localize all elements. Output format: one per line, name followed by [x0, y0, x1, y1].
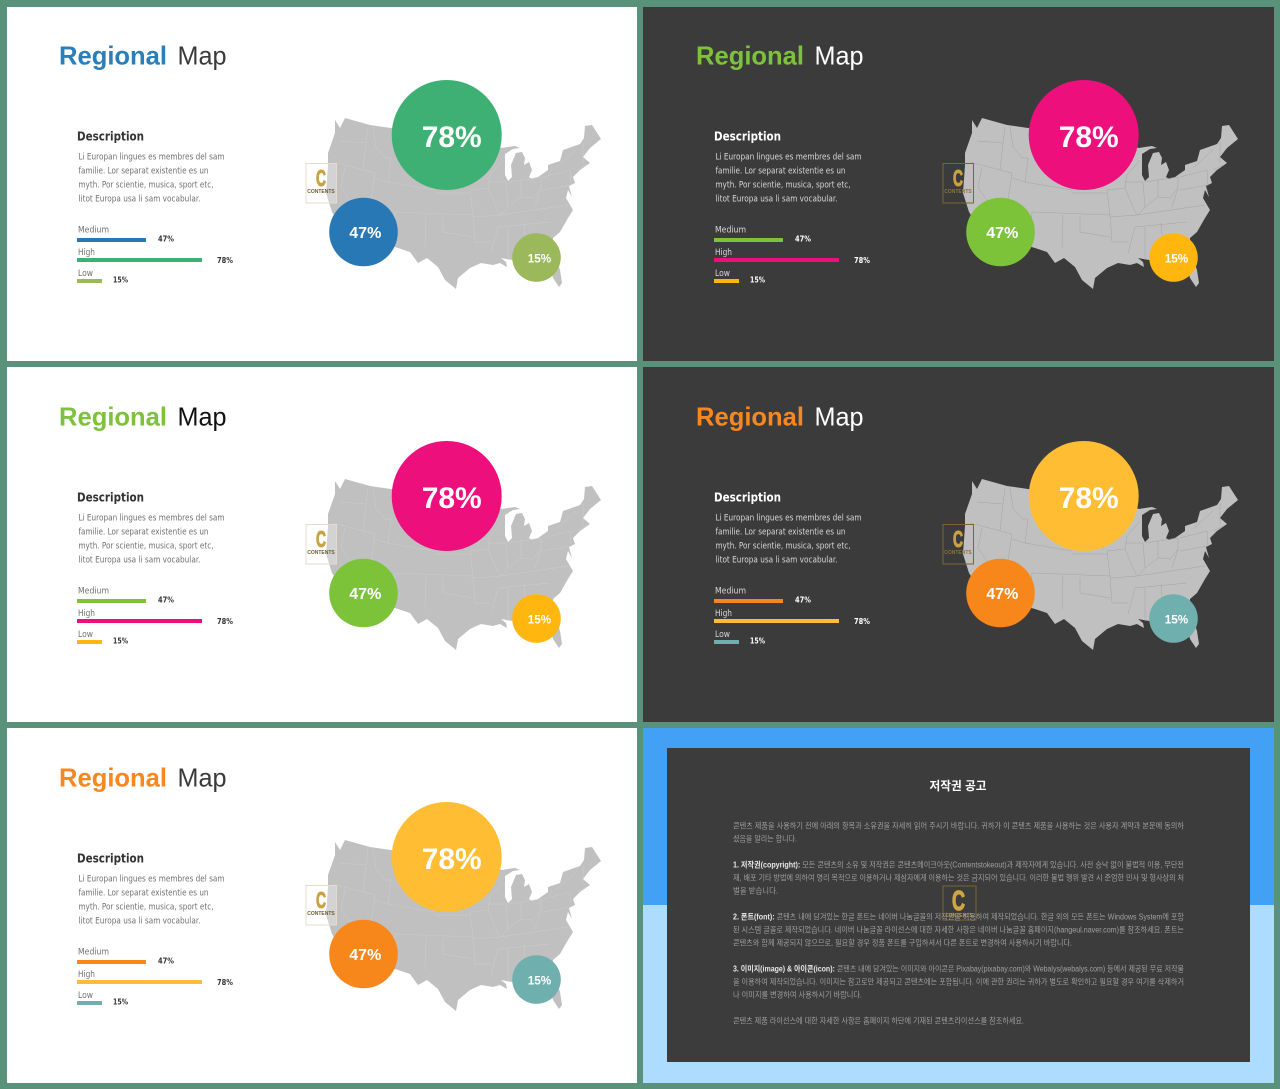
circle 15%: 15%	[528, 612, 552, 626]
bar legend	[77, 586, 233, 646]
circle 47%: 47%	[349, 947, 381, 964]
panel: orange and yellow dark slide	[643, 367, 1274, 722]
description: familie. Lor separat existentie es un	[78, 528, 208, 538]
circle 15%	[1149, 233, 1198, 282]
logo watermark: CONTENTS	[945, 913, 973, 919]
bar legend: Low	[715, 629, 730, 639]
bar legend: Medium	[78, 947, 109, 957]
bar legend: High	[715, 608, 732, 618]
copyright clause 3	[733, 964, 1184, 1000]
description: Description	[77, 852, 144, 866]
copyright clause 3: 나 이미지를 변경하여 사용하시기 바랍니다.	[733, 990, 862, 1000]
logo watermark	[943, 164, 974, 203]
circle 78%	[392, 802, 502, 912]
description: Li Europan lingues es membres del sam	[716, 514, 862, 524]
logo watermark	[306, 524, 336, 564]
panel: blue and green light slide	[7, 7, 637, 361]
title: Map	[178, 762, 226, 792]
title: Regional	[59, 40, 167, 70]
description: myth. Por scientie, musica, sport etc,	[78, 902, 214, 912]
circle 78%: 78%	[1059, 121, 1119, 154]
title	[696, 40, 864, 70]
copyright clause 2: 콘텐츠와 함께 제공되지 않으므로, 필요할 경우 정품 폰트를 구입하셔서 다른 폰트로 변경하여 사용하시기 바랍니다.	[733, 938, 1072, 948]
panel: copyright notice	[643, 728, 1274, 1083]
copyright clause 2: 된 시스템 글꼴로 제작되었습니다. 네이버 나눔글꼴 라이선스에 대한 자세한 사항은 네이버 나눔글꼴 홈페이지(hangeul.naver.com)를 참조하세요. 폰트는	[733, 924, 1184, 934]
logo watermark: CONTENTS	[944, 189, 972, 195]
title: Map	[814, 402, 864, 432]
circle 47%: 47%	[986, 225, 1018, 242]
bar legend: High	[78, 969, 95, 979]
bar legend: Medium	[78, 225, 109, 235]
bar legend	[77, 947, 233, 1006]
circle 47%: 47%	[349, 586, 381, 603]
logo watermark	[943, 885, 976, 920]
logo watermark: CONTENTS	[307, 189, 335, 195]
copyright intro: 셨음을 알리는 합니다.	[733, 834, 797, 844]
bar legend: Medium	[715, 586, 746, 596]
title: Regional	[696, 40, 804, 70]
copyright intro	[733, 820, 1185, 844]
circle 15%	[512, 594, 561, 643]
description: Description	[77, 130, 144, 144]
copyright clause 2: 2. 폰트(font): 콘텐츠 내에 담겨있는 한글 폰트는 네이버 나눔글꼴의 저작권을 허용하여 제작되었습니다. 한글 외의 모든 폰트는 Windows System에 포함	[733, 912, 1185, 922]
copyright clause 1	[733, 860, 1184, 896]
description: Description	[714, 130, 781, 144]
title	[59, 762, 226, 792]
circle 15%	[512, 233, 561, 282]
copyright clause 1: 재, 배포 기타 방법에 의하여 영리 목적으로 이용하거나 제삼자에게 이용하는 것은 금지되어 있습니다. 이러한 불법 행위 발견 시 준엄한 민사 및 형사상의 처	[733, 872, 1184, 882]
logo watermark: CONTENTS	[307, 550, 335, 556]
circle 78%	[392, 441, 502, 551]
logo watermark: C	[953, 165, 963, 191]
logo watermark: CONTENTS	[307, 911, 335, 917]
copyright clause 1: 벌을 받습니다.	[733, 886, 778, 896]
bar legend: Medium	[78, 586, 109, 596]
description: Li Europan lingues es membres del sam	[716, 152, 862, 162]
logo watermark: C	[953, 526, 963, 552]
circle 78%: 78%	[1059, 482, 1119, 515]
bar legend: 15%	[113, 276, 128, 284]
description	[77, 852, 224, 926]
bar legend: Low	[78, 629, 93, 639]
bar legend: Medium	[715, 225, 746, 235]
description: familie. Lor separat existentie es un	[78, 166, 208, 176]
description: Li Europan lingues es membres del sam	[78, 152, 224, 162]
logo watermark: CONTENTS	[944, 550, 972, 556]
title	[696, 402, 864, 432]
circle 15%: 15%	[528, 251, 552, 265]
circle 78%	[392, 80, 502, 190]
circle 15%: 15%	[1165, 251, 1189, 265]
panel: pink and green dark slide	[643, 7, 1274, 361]
bar legend: 15%	[750, 636, 765, 646]
copyright clause 3: 을 이용하여 제작되었습니다. 이미지는 참고로만 제공되고 콘텐츠에는 포함됩니다. 이에 관한 권리는 귀하가 별도로 확인하고 필요할 경우 여기를 삭제하거	[733, 976, 1184, 986]
bar legend	[77, 225, 233, 284]
bar legend: 78%	[217, 978, 233, 987]
description	[714, 491, 862, 566]
bar legend: Low	[78, 268, 93, 278]
description	[77, 491, 224, 566]
logo watermark: C	[952, 885, 965, 916]
title: Regional	[59, 402, 167, 432]
description: Description	[714, 491, 781, 505]
map	[963, 118, 1238, 289]
logo watermark	[943, 524, 974, 564]
circle 47%: 47%	[986, 586, 1018, 603]
title: Regional	[696, 402, 804, 432]
logo watermark	[306, 164, 336, 203]
map	[326, 118, 601, 289]
title: Map	[178, 40, 226, 70]
description: Li Europan lingues es membres del sam	[78, 514, 224, 524]
circle 78%	[1029, 80, 1139, 190]
title: Regional	[59, 762, 167, 792]
circle 15%: 15%	[1165, 612, 1189, 626]
logo watermark	[306, 886, 336, 925]
description: myth. Por scientie, musica, sport etc,	[78, 180, 214, 190]
bar legend: Low	[715, 268, 730, 278]
description: litot Europa usa li sam vocabular.	[716, 194, 838, 204]
bar legend: High	[78, 608, 95, 618]
circle 15%	[1149, 594, 1198, 643]
circle 47%	[966, 198, 1035, 266]
description: litot Europa usa li sam vocabular.	[716, 556, 838, 566]
bar legend: 15%	[113, 636, 128, 646]
circle 78%: 78%	[422, 121, 482, 154]
copyright footer: 콘텐츠 제품 라이선스에 대한 자세한 사항은 홈페이지 하단에 기재된 콘텐츠라이선스를 참조하세요.	[733, 1016, 1024, 1026]
copyright clause 2	[733, 912, 1185, 948]
title	[59, 402, 226, 432]
circle 47%	[329, 920, 398, 988]
bar legend	[714, 225, 870, 284]
circle 47%	[329, 559, 398, 627]
bar legend: 47%	[158, 956, 174, 966]
description	[77, 130, 224, 204]
description: familie. Lor separat existentie es un	[716, 528, 846, 538]
bar legend: 47%	[158, 596, 174, 604]
copyright heading: 저작권 공고	[930, 778, 986, 793]
bar legend: 78%	[854, 256, 870, 265]
bar legend: 78%	[854, 617, 870, 626]
logo watermark: C	[316, 526, 326, 552]
bar legend: High	[78, 247, 95, 257]
circle 78%: 78%	[422, 843, 482, 876]
description: litot Europa usa li sam vocabular.	[78, 194, 200, 204]
circle 47%: 47%	[349, 225, 381, 242]
logo watermark: C	[316, 165, 326, 191]
title	[59, 40, 226, 70]
bar legend: 78%	[217, 256, 233, 265]
description: myth. Por scientie, musica, sport etc,	[78, 542, 214, 552]
title: Map	[178, 402, 226, 432]
map	[326, 479, 601, 650]
bar legend: 47%	[795, 596, 811, 604]
bar legend: Low	[78, 990, 93, 1000]
panel: orange and yellow light slide	[7, 728, 637, 1083]
circle 78%: 78%	[422, 482, 482, 515]
description: myth. Por scientie, musica, sport etc,	[716, 180, 850, 190]
bar legend: High	[715, 247, 732, 257]
circle 78%	[1029, 441, 1139, 551]
copyright clause 3: 3. 이미지(image) & 아이콘(icon): 콘텐츠 내에 담겨있는 이미지와 아이콘은 Pixabay(pixabay.com)와 Webalys(webalys.com) 등에서 제공된 무료 저작물	[733, 964, 1184, 974]
description: myth. Por scientie, musica, sport etc,	[716, 542, 850, 552]
bar legend: 47%	[158, 234, 174, 244]
map	[963, 479, 1238, 650]
circle 47%	[329, 198, 398, 266]
description: Li Europan lingues es membres del sam	[78, 874, 224, 884]
copyright clause 1: 1. 저작권(copyright): 모든 콘텐츠의 소유 및 저작권은 콘텐츠메이크아웃(Contentstokeout)과 제작자에게 있습니다. 사전 승낙 없이 불법적 이용, 무단전	[733, 860, 1184, 870]
logo watermark: C	[316, 887, 326, 913]
bar legend: 78%	[217, 617, 233, 626]
bar legend: 15%	[113, 998, 128, 1006]
bar legend: 15%	[750, 276, 765, 284]
copyright intro: 콘텐츠 제품을 사용하기 전에 아래의 항목과 소유권을 자세히 읽어 주시기 바랍니다. 귀하가 이 콘텐츠 제품을 사용하는 것은 사용자 계약과 본문에 동의하	[733, 820, 1185, 830]
description: litot Europa usa li sam vocabular.	[78, 916, 200, 926]
bar legend	[714, 586, 870, 646]
map	[326, 840, 601, 1011]
description: litot Europa usa li sam vocabular.	[78, 556, 200, 566]
circle 15%: 15%	[528, 973, 552, 987]
circle 47%	[966, 559, 1035, 627]
description: Description	[77, 491, 144, 505]
description	[714, 130, 862, 204]
bar legend: 47%	[795, 234, 811, 244]
title: Map	[814, 40, 864, 70]
description: familie. Lor separat existentie es un	[716, 166, 846, 176]
panel: pink and green light slide	[7, 367, 637, 722]
description: familie. Lor separat existentie es un	[78, 888, 208, 898]
circle 15%	[512, 955, 561, 1004]
